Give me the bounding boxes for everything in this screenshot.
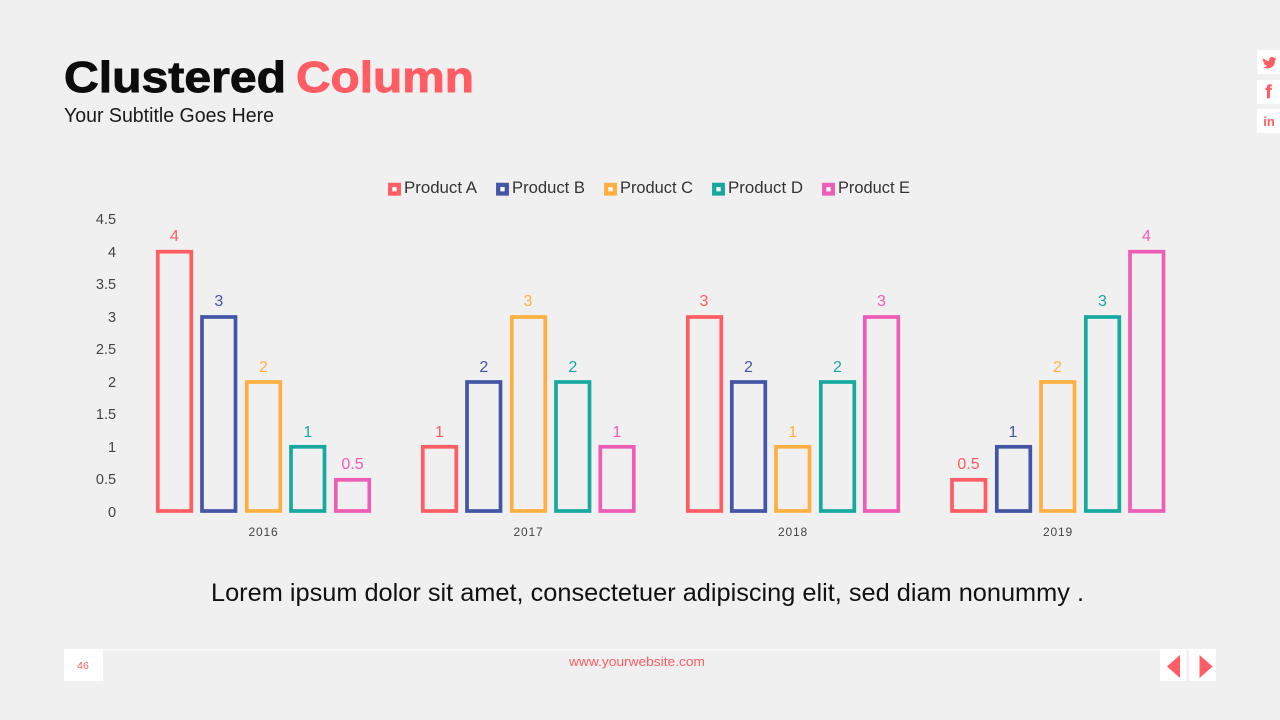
column: 2018 Product B = 2: 2 (744, 359, 753, 376)
column: 2017 Product D = 2 (556, 359, 590, 511)
column: 2016 Product B = 3 (202, 293, 236, 511)
column: 2016 Product A = 4: 4 (170, 228, 179, 245)
social icons (1257, 50, 1280, 133)
column: 2017 Product B = 2: 2 (479, 359, 488, 376)
year label: 2018 (778, 525, 808, 539)
chart group: 2016 (158, 228, 369, 539)
column: 2018 Product C = 1: 1 (788, 424, 797, 441)
icon: next arrow (1189, 649, 1216, 681)
column: 2019 Product C = 2 (1041, 359, 1074, 511)
column: 2016 Product A = 4 (158, 228, 191, 511)
title (64, 53, 474, 102)
column: 2017 Product B = 2 (467, 359, 500, 511)
column: 2019 Product B = 1: 1 (1009, 424, 1018, 441)
column: 2016 Product E = 0.5 (336, 456, 369, 511)
y axis labels: 1.5 (96, 407, 116, 423)
chart group: 2017 (423, 293, 634, 539)
column: 2017 Product D = 2: 2 (568, 359, 577, 376)
icon: facebook: f (1266, 82, 1272, 102)
column: 2016 Product D = 1 (291, 424, 324, 511)
y axis labels: 0.5 (96, 472, 116, 488)
column: 2019 Product A = 0.5: 0.5 (957, 456, 980, 473)
body text: Lorem ipsum dolor sit amet, consectetuer adipiscing elit, sed diam nonummy . (211, 579, 1084, 607)
column: 2016 Product B = 3: 3 (214, 293, 223, 310)
column: 2019 Product A = 0.5 (952, 456, 986, 511)
title: Column (296, 53, 474, 102)
column: 2017 Product C = 3: 3 (524, 293, 533, 310)
column: 2016 Product C = 2 (247, 359, 280, 511)
year label: 2017 (514, 525, 543, 539)
column: 2016 Product C = 2: 2 (259, 359, 268, 376)
y axis labels: 4 (108, 245, 116, 261)
year label: 2016 (249, 525, 278, 539)
column: 2019 Product B = 1 (997, 424, 1030, 511)
y axis labels (96, 212, 116, 521)
legend item: Product B: Product B (512, 178, 585, 197)
website url: www.yourwebsite.com (568, 654, 705, 669)
chart group: 2018 (688, 293, 898, 539)
column: 2018 Product A = 3: 3 (700, 293, 709, 310)
title: Clustered (64, 53, 286, 102)
icon: linkedin: in (1263, 114, 1275, 129)
legend (390, 178, 910, 197)
column: 2018 Product E = 3 (865, 293, 898, 511)
y axis labels: 0 (108, 505, 116, 521)
column: 2017 Product A = 1: 1 (435, 424, 444, 441)
column: 2017 Product A = 1 (423, 424, 456, 511)
column: 2018 Product D = 2: 2 (833, 359, 842, 376)
column: 2016 Product E = 0.5: 0.5 (341, 456, 364, 473)
legend item: Product A: Product A (404, 178, 478, 197)
y axis labels: 2.5 (96, 342, 116, 358)
column: 2016 Product D = 1: 1 (303, 424, 312, 441)
y axis labels: 2 (108, 375, 116, 391)
column: 2018 Product A = 3 (688, 293, 721, 511)
column: 2019 Product C = 2: 2 (1053, 359, 1062, 376)
year label: 2019 (1043, 525, 1073, 539)
column: 2018 Product C = 1 (776, 424, 810, 511)
y axis labels: 3 (108, 310, 116, 326)
y axis labels: 3.5 (96, 277, 116, 293)
column: 2019 Product E = 4 (1130, 228, 1164, 511)
column: 2018 Product B = 2 (732, 359, 765, 511)
chart group: 2019 (952, 228, 1164, 539)
subtitle: Your Subtitle Goes Here (64, 105, 274, 127)
legend item: Product C: Product C (620, 178, 693, 197)
page number: 46 (77, 660, 89, 672)
column: 2017 Product E = 1: 1 (613, 424, 622, 441)
column: 2019 Product D = 3: 3 (1098, 293, 1107, 310)
page number (64, 649, 103, 681)
legend item: Product E: Product E (838, 178, 910, 197)
column: 2019 Product E = 4: 4 (1142, 228, 1151, 245)
column: 2019 Product D = 3 (1086, 293, 1119, 511)
icon: twitter (1257, 50, 1280, 74)
column: 2017 Product C = 3 (512, 293, 545, 511)
icon: previous arrow (1160, 649, 1186, 681)
column: 2018 Product E = 3: 3 (877, 293, 886, 310)
column: 2018 Product D = 2 (821, 359, 854, 511)
column: 2017 Product E = 1 (600, 424, 634, 511)
y axis labels: 4.5 (96, 212, 116, 228)
y axis labels: 1 (108, 440, 116, 456)
legend item: Product D: Product D (728, 178, 803, 197)
